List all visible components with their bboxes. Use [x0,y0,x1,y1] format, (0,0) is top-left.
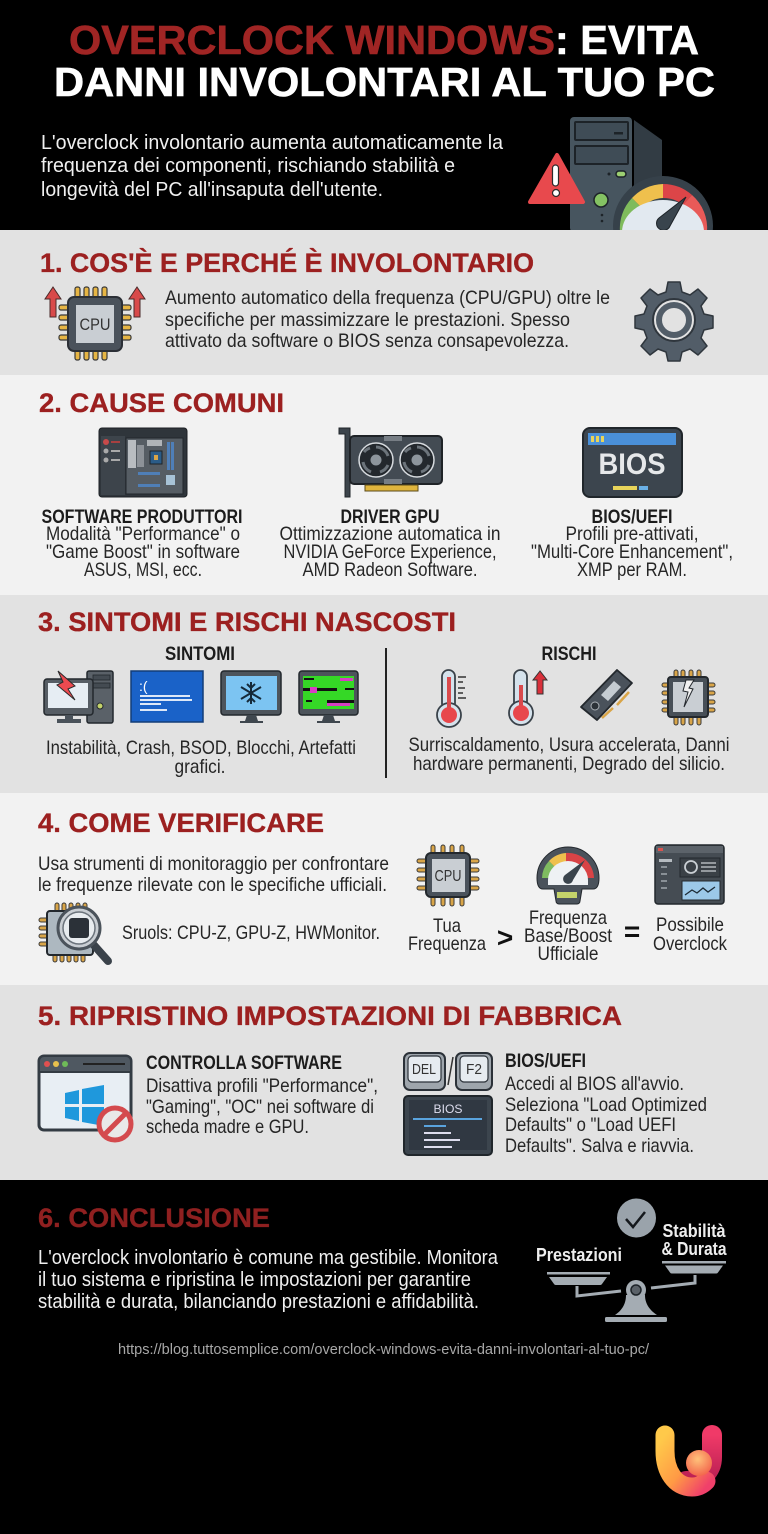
text: definition: attivato da software o BIOS senza consapevolezza. [165,330,569,352]
intro text: longevità del PC all'insaputa dell'utente. [41,178,383,201]
intro text [41,131,504,201]
intro text: L'overclock involontario aumenta automaticamente la [41,131,504,154]
icon: crashed pc [44,671,113,723]
icon: graphics card [339,428,442,497]
text: software produttori: SOFTWARE PRODUTTORI [42,507,242,528]
formula: frequency comparison: Possibile [656,914,724,936]
icon: BIOS screen [583,428,682,497]
icon: blue screen [131,671,203,722]
formula: frequency comparison: Overclock [653,933,727,955]
icon: CPU: CPU [434,868,462,885]
icon: thermometer rising [509,670,547,725]
icon: balance scale: & Durata [662,1239,727,1259]
text: come verificare: le frequenze rilevate con le specifiche ufficiali. [38,874,387,896]
icon: windows with block sign [39,1056,131,1140]
subheading: rischi: RISCHI [542,644,596,665]
text: sintomi [46,737,356,778]
text: conclusion: L'overclock involontario è comune ma gestibile. Monitora [38,1246,499,1269]
formula: frequency comparison: = [624,916,640,947]
text: driver gpu [280,507,500,581]
text: come verificare [38,853,389,896]
title: DANNI INVOLONTARI AL TUO PC [54,59,715,105]
text: bios uefi: Profili pre-attivati, [566,523,698,545]
icon: DEL and F2 keys [404,1053,492,1090]
icon: CPU with up arrows [45,287,145,360]
source url: https://blog.tuttosemplice.com/overclock-windows-evita-danni-involontari-al-tuo-pc/ [118,1341,650,1358]
text: definition: specifiche per massimizzare le prestazioni. Spesso [165,309,570,331]
formula: frequency comparison: Base/Boost [524,925,613,947]
icon: balance scale [536,1198,727,1322]
text: bios uefi: XMP per RAM. [577,559,687,581]
heading 5: 5. RIPRISTINO IMPOSTAZIONI DI FABBRICA [38,1001,622,1031]
icon: balance scale: Prestazioni [536,1245,622,1265]
icon: damaged ram card [581,670,632,720]
icon: BIOS screen: BIOS [598,448,666,481]
text: bios uefi: BIOS/UEFI [592,507,672,528]
formula: frequency comparison: Tua [433,915,461,937]
icon: monitoring window [655,845,724,904]
logo [665,1435,712,1487]
icon: CPU with up arrows: CPU [80,315,110,334]
text: driver gpu: NVIDIA GeForce Experience, [284,541,496,563]
panel: section 3 [0,595,768,793]
text: bios uefi [531,507,733,581]
formula: frequency comparison: > [497,922,513,953]
text: bios uefi steps [505,1051,707,1157]
text: bios uefi steps: Accedi al BIOS all'avvio. [505,1073,684,1095]
text: controlla software [146,1053,378,1138]
text: sintomi: grafici. [174,756,226,778]
text: rischi: hardware permanenti, Degrado del silicio. [413,753,725,775]
icon: BIOS menu [404,1096,492,1155]
text: conclusion: il tuo sistema e ripristina le impostazioni per garantire [38,1268,471,1291]
panel: section 2 [0,375,768,595]
text: come verificare: Usa strumenti di monitoraggio per confrontare [38,853,389,875]
title [54,17,715,105]
text: bios uefi steps: Defaults" o "Load UEFI [505,1114,676,1136]
text: driver gpu: DRIVER GPU [340,507,440,528]
heading 3: 3. SINTOMI E RISCHI NASCOSTI [38,607,456,637]
formula: frequency comparison: Frequenza [408,933,486,955]
formula: frequency comparison: Frequenza [529,907,607,929]
formula: frequency comparison [408,907,727,965]
title: : EVITA [555,17,699,63]
icon: gear [635,282,713,361]
icon: DEL and F2 keys: DEL [412,1061,436,1078]
icon: speed gauge [537,847,599,904]
icon: frozen monitor [221,671,281,723]
panel: section 4 [0,793,768,985]
text: controlla software: scheda madre e GPU. [146,1116,309,1138]
text: software produttori [42,507,242,581]
heading 1: 1. COS'È E PERCHÉ È INVOLONTARIO [40,247,534,278]
text: controlla software: CONTROLLA SOFTWARE [146,1053,342,1074]
icon: motherboard [99,428,187,497]
text: rischi [408,734,730,775]
icon: thermometer [437,670,466,727]
heading 6: 6. CONCLUSIONE [38,1203,270,1233]
icon: chip under magnifier [39,903,108,962]
intro text: frequenza dei componenti, rischiando stabilità e [41,154,455,177]
text: bios uefi: "Multi-Core Enhancement", [531,541,733,563]
icon: DEL and F2 keys: F2 [466,1061,482,1078]
text: conclusion [38,1246,499,1313]
text: bios uefi steps: BIOS/UEFI [505,1051,586,1072]
text: conclusion: stabilità e durata, bilanciando prestazioni e affidabilità. [38,1290,479,1313]
panel: section 5 [0,985,768,1180]
panel: section 1 [0,230,768,375]
text: driver gpu: Ottimizzazione automatica in [280,523,500,545]
icon: blue screen: :( [139,678,148,694]
heading 2: 2. CAUSE COMUNI [39,388,284,418]
text: sintomi: Instabilità, Crash, BSOD, Blocchi, Artefatti [46,737,356,759]
text: definition [165,287,610,352]
text: bios uefi steps: Seleziona "Load Optimized [505,1094,707,1116]
text: software produttori: ASUS, MSI, ecc. [84,559,202,581]
icon: BIOS menu: BIOS [434,1102,462,1116]
text: bios uefi steps: Defaults". Salva e riavvia. [505,1135,694,1157]
icon: artifact monitor [299,671,358,723]
text: controlla software: "Gaming", "OC" nei software di [146,1096,374,1118]
text: software produttori: "Game Boost" in software [46,541,240,563]
text: software produttori: Modalità "Performance" o [46,523,240,545]
heading 4: 4. COME VERIFICARE [38,808,324,838]
icon: PC tower with warning and gauge [530,117,713,276]
text: driver gpu: AMD Radeon Software. [302,559,478,581]
icon: cracked cpu [662,670,715,725]
title: OVERCLOCK WINDOWS [69,17,555,63]
icon: balance scale: Stabilità [662,1221,726,1241]
icon: CPU [417,845,479,906]
text: definition: Aumento automatico della frequenza (CPU/GPU) oltre le [165,287,610,309]
divider [385,648,387,778]
text: tools: Sruols: CPU-Z, GPU-Z, HWMonitor. [122,922,380,944]
text: controlla software: Disattiva profili "Performance", [146,1075,378,1097]
subheading: sintomi: SINTOMI [165,644,235,665]
formula: frequency comparison: Ufficiale [538,943,598,965]
